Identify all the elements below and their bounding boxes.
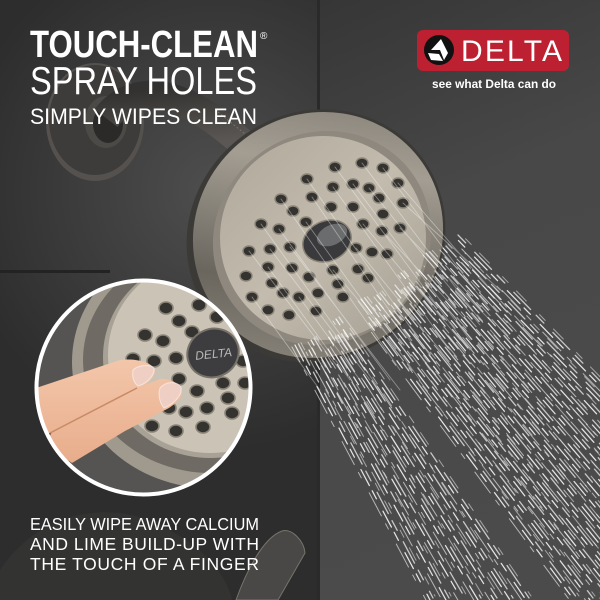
caption: EASILY WIPE AWAY CALCIUM [30, 514, 259, 534]
inset badge [186, 328, 240, 378]
caption: AND LIME BUILD-UP WITH [30, 534, 259, 554]
shower arm [106, 95, 250, 150]
inset circle: finger wiping spray face [34, 278, 252, 496]
registered mark: ® [260, 31, 268, 42]
water spray [249, 163, 600, 600]
inset spray holes [126, 299, 252, 437]
icon: Delta emblem [424, 35, 454, 65]
tagline: see what Delta can do [432, 77, 556, 91]
fingernails [133, 366, 154, 386]
two fingers [30, 359, 182, 463]
spray holes [240, 158, 409, 320]
inset head rim and face [72, 282, 248, 486]
wall flange [46, 63, 144, 181]
title [30, 24, 268, 129]
center badge [296, 212, 358, 270]
Delta logo [417, 30, 569, 91]
title: SIMPLY WIPES CLEAN [30, 104, 257, 129]
shower head [137, 59, 495, 413]
Delta logo: DELTA [461, 35, 562, 68]
inset badge: DELTA [194, 345, 233, 363]
caption: THE TOUCH OF A FINGER [30, 554, 259, 574]
title: SPRAY HOLES [30, 60, 257, 103]
caption [30, 514, 259, 574]
title: TOUCH-CLEAN [30, 24, 258, 66]
tub spout plate [0, 512, 232, 600]
tub faucet handle [236, 531, 305, 600]
